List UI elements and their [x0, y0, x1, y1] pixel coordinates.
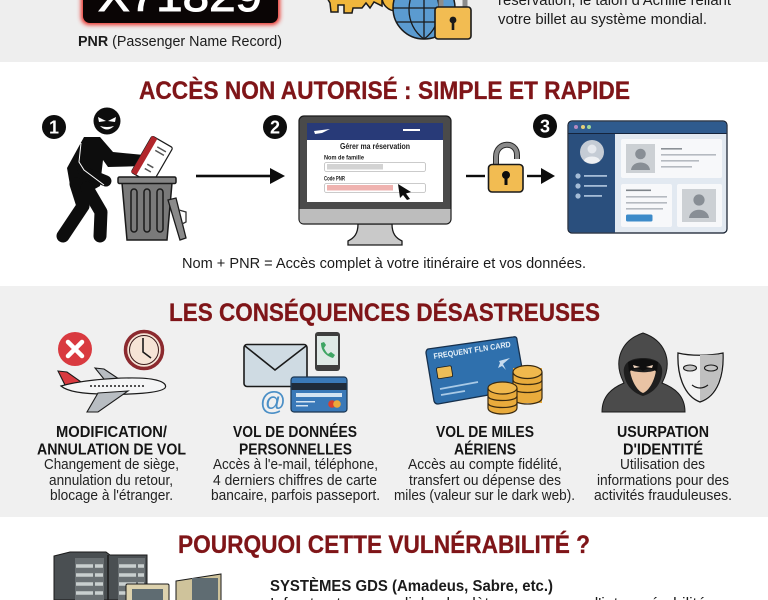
connector: monitor to lock	[466, 175, 485, 177]
badge: step 2: 2	[270, 118, 280, 138]
icon: airplane	[58, 368, 166, 412]
text: identity theft: activités frauduleuses.	[594, 488, 732, 504]
section background: consequences	[0, 286, 768, 517]
text: air miles theft: miles (valeur sur le dark web).	[394, 488, 575, 504]
panel: personal data theft	[211, 332, 380, 504]
panel: account dashboard	[568, 121, 727, 233]
badge: step 3: 3	[540, 116, 550, 136]
PNR label: PNR (Passenger Name Record)	[78, 33, 282, 50]
icon: hooded hacker	[602, 333, 685, 412]
text: GDS systems	[270, 578, 706, 600]
icon: legacy servers	[54, 552, 147, 600]
text: GDS systems: SYSTÈMES GDS (Amadeus, Sabre, etc.)	[270, 578, 553, 595]
icon: computer monitor: Gérer ma réservation	[340, 142, 410, 151]
heading: access: ACCÈS NON AUTORISÉ : SIMPLE ET RAPIDE	[139, 76, 630, 105]
text: air miles theft: VOL DE MILES	[436, 424, 534, 441]
text: identity theft: USURPATION	[617, 424, 709, 441]
text: air miles theft: Accès au compte fidélité,	[408, 457, 562, 473]
text: flight modification: blocage à l'étranger.	[50, 488, 173, 504]
icon: open padlock	[488, 145, 523, 192]
badge: step 1	[42, 115, 66, 139]
text: flight modification: MODIFICATION/	[56, 424, 168, 441]
text: flight modification: Changement de siège,	[44, 457, 179, 473]
intro text	[498, 0, 732, 28]
text: flight modification: annulation du retour,	[49, 473, 173, 489]
arrow: thief to website	[196, 168, 285, 184]
heading: consequences: LES CONSÉQUENCES DÉSASTREUSES	[169, 298, 600, 327]
icon: padlock	[435, 0, 471, 39]
text: personal data theft: PERSONNELLES	[239, 442, 352, 458]
text: identity theft	[594, 424, 732, 504]
text: identity theft: D'IDENTITÉ	[623, 440, 703, 458]
badge: step 2	[263, 115, 287, 139]
icon: gold key	[326, 0, 410, 13]
icon: old computers	[126, 574, 221, 600]
text: air miles theft: transfert ou dépense des	[409, 473, 561, 489]
section background: why	[0, 517, 768, 600]
badge: step 3	[533, 114, 557, 138]
text: air miles theft: AÉRIENS	[454, 440, 516, 458]
text: identity theft: informations pour des	[597, 473, 729, 489]
icon: envelope	[244, 344, 307, 386]
text: personal data theft: Accès à l'e-mail, téléphone,	[213, 457, 378, 473]
icon: red cross	[58, 332, 92, 366]
heading: why: POURQUOI CETTE VULNÉRABILITÉ ?	[178, 530, 590, 559]
icon: at sign: @	[260, 386, 286, 416]
text: personal data theft: bancaire, parfois passeport.	[211, 488, 380, 504]
text: flight modification	[37, 424, 186, 504]
text: flight modification: ANNULATION DE VOL	[37, 442, 186, 458]
text: personal data theft	[211, 422, 380, 504]
caption: access: Nom + PNR = Accès complet à votre itinéraire et vos données.	[182, 255, 586, 272]
text: personal data theft: VOL DE DONNÉES	[233, 422, 357, 441]
icon: clock	[126, 332, 162, 368]
icon: loyalty card: FREQUENT FLN CARD	[433, 340, 512, 361]
text: identity theft: Utilisation des	[620, 457, 705, 473]
icon: computer monitor: Code PNR	[324, 176, 345, 182]
panel: air miles theft	[394, 337, 575, 504]
icon: theatre mask	[678, 353, 723, 402]
icon: gold coins	[488, 366, 542, 414]
icon: thief	[63, 108, 144, 236]
icon: credit card	[291, 377, 347, 412]
section background: intro	[0, 0, 768, 62]
panel: identity theft	[594, 333, 732, 504]
icon: boarding pass	[131, 136, 173, 184]
icon: phone	[315, 332, 340, 371]
section background: access	[0, 62, 768, 286]
arrow: lock to account	[527, 168, 555, 184]
icon: computer monitor	[299, 116, 451, 245]
icon: trash can	[118, 177, 186, 240]
icon: computer monitor: Nom de famille	[324, 154, 364, 162]
icon: globe	[393, 0, 455, 39]
intro text: votre billet au système mondial.	[498, 11, 707, 28]
panel: flight modification	[37, 332, 186, 504]
panel: PNR code display	[81, 0, 280, 25]
text: personal data theft: 4 derniers chiffres de carte	[213, 473, 377, 489]
badge: step 1: 1	[49, 118, 59, 138]
text: air miles theft	[394, 424, 575, 504]
icon: loyalty card	[426, 337, 525, 404]
